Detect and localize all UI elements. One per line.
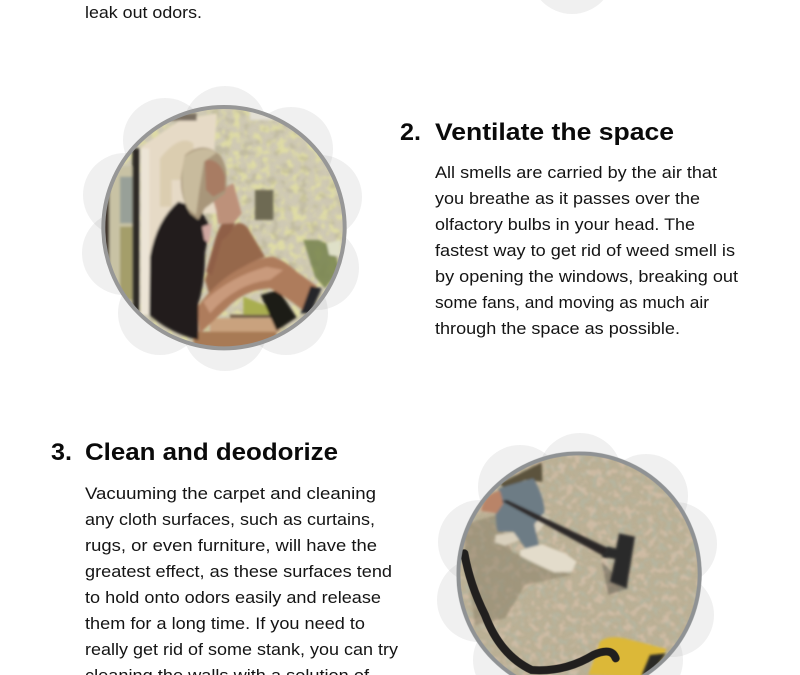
text block: step 2 body: All smells are carried by the air that [435, 163, 717, 182]
arm and hand [206, 217, 235, 275]
hose [464, 553, 616, 670]
jacket [149, 202, 210, 340]
petal frame [82, 86, 362, 371]
plant [303, 240, 340, 288]
text block: step 2 body [435, 163, 738, 338]
text block: step 2 body: fastest way to get rid of weed smell is [435, 241, 735, 260]
heading: step 3: 3. [51, 439, 72, 466]
heading: step 2: 2. [400, 119, 421, 146]
text block: step 3 body: any cloth surfaces, such as curtains, [85, 510, 375, 529]
text block: step 2 body: through the space as possible. [435, 319, 680, 338]
trousers top [500, 462, 542, 490]
text block: step 3 body: greatest effect, as these surfaces tend [85, 562, 392, 581]
text block: step 2 body: olfactory bulbs in your head. The [435, 215, 695, 234]
shadow on carpet [462, 515, 572, 625]
vacuum wand [502, 500, 610, 558]
hair and face [181, 147, 227, 220]
nozzle [602, 533, 635, 588]
near shoe [520, 544, 577, 572]
text block: step 3 body: Vacuuming the carpet and cleaning [85, 484, 376, 503]
image: vacuuming a carpet with petal frame [437, 433, 717, 675]
photo ring [103, 107, 345, 348]
far leg [205, 223, 265, 297]
photo ring [458, 453, 700, 675]
wall and window frame [142, 113, 218, 278]
far shoe [495, 514, 550, 546]
decorative petal from step 1 image [530, 0, 614, 14]
heading: step 2: Ventilate the space [435, 119, 674, 146]
near leg [198, 257, 317, 334]
text block: step 2 body: by opening the windows, breaking out [435, 267, 738, 286]
hand [481, 491, 503, 513]
text block: step 3 body: really get rid of some stank, you can try [85, 640, 399, 659]
text block: step 2 body: some fans, and moving as much air [435, 293, 709, 312]
photo [100, 103, 350, 355]
heading: step 3: Clean and deodorize [85, 439, 338, 466]
text block: step 3 body: them for a long time. If you need to [85, 614, 365, 633]
text block: step 3 body: to hold onto odors easily and release [85, 588, 381, 607]
text block: end of step 1: leak out odors. [85, 3, 202, 22]
petal frame [437, 433, 717, 675]
text block: step 3 body: rugs, or even furniture, will have the [85, 536, 377, 555]
image: woman at window with petal frame [82, 86, 362, 371]
text block: step 3 body [85, 484, 399, 675]
far leg boot [261, 290, 297, 331]
text block: step 2 body: you breathe as it passes over the [435, 189, 700, 208]
jeans [496, 478, 544, 550]
yellow canister [588, 637, 667, 675]
sill [210, 318, 280, 332]
photo [455, 452, 705, 675]
